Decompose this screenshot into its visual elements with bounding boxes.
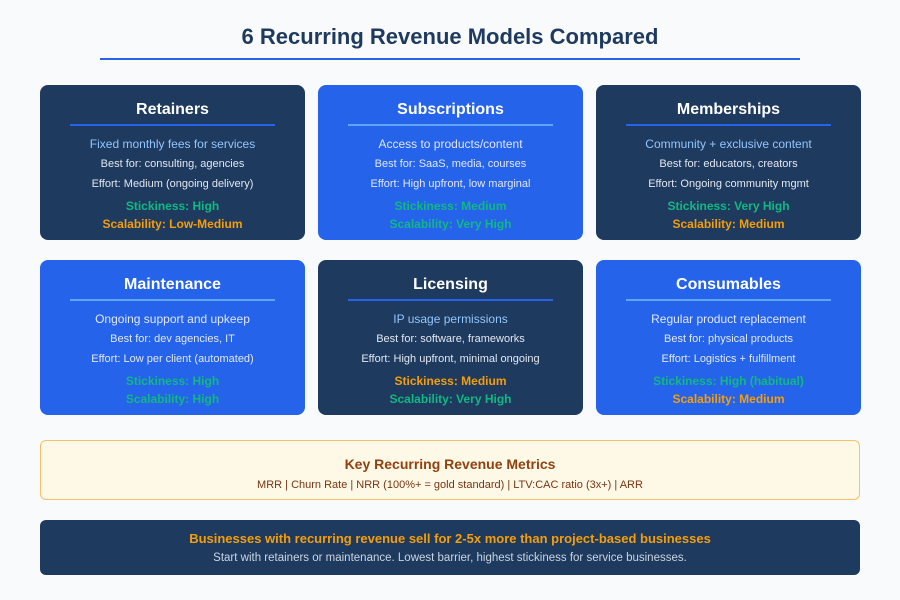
panel: memberships: Community + exclusive content: [645, 137, 812, 151]
panel: maintenance: Stickiness: High: [126, 374, 219, 388]
panel: metrics: MRR | Churn Rate | NRR (100%+ = gold standard) | LTV:CAC ratio (3x+) | ARR: [257, 479, 643, 491]
panel: retainers: Fixed monthly fees for services: [90, 137, 255, 151]
panel: takeaway: Start with retainers or maintenance. Lowest barrier, highest stickiness for service businesses.: [213, 552, 687, 564]
panel: subscriptions: Stickiness: Medium: [394, 199, 507, 213]
panel: takeaway: Businesses with recurring revenue sell for 2-5x more than project-based businesses: [189, 531, 711, 546]
panel: consumables: Stickiness: High (habitual): [653, 374, 804, 388]
panel: licensing: Scalability: Very High: [389, 392, 512, 406]
panel: subscriptions: [318, 85, 583, 240]
panel: licensing: Stickiness: Medium: [394, 374, 507, 388]
panel: retainers: Best for: consulting, agencies: [101, 158, 244, 170]
panel: takeaway: [40, 520, 860, 575]
panel: consumables: Best for: physical products: [664, 333, 793, 345]
panel: licensing: IP usage permissions: [393, 312, 508, 326]
panel: consumables: Scalability: Medium: [672, 392, 785, 406]
title: 6 Recurring Revenue Models Compared: [242, 24, 658, 49]
panel: maintenance: Maintenance: [124, 276, 221, 293]
panel: memberships: Memberships: [677, 101, 780, 118]
panel: retainers: Stickiness: High: [126, 199, 219, 213]
panel: subscriptions: Access to products/content: [378, 137, 523, 151]
panel: retainers: Scalability: Low-Medium: [102, 217, 242, 231]
panel: maintenance: Ongoing support and upkeep: [95, 312, 250, 326]
panel: licensing: Effort: High upfront, minimal ongoing: [361, 353, 540, 365]
panel: metrics: [40, 440, 860, 500]
panel: maintenance: Scalability: High: [126, 392, 219, 406]
panel: consumables: [596, 260, 861, 415]
panel: subscriptions: Subscriptions: [397, 101, 504, 118]
panel: maintenance: Effort: Low per client (automated): [91, 353, 254, 365]
panel: licensing: [318, 260, 583, 415]
panel: maintenance: [40, 260, 305, 415]
panel: metrics: Key Recurring Revenue Metrics: [345, 456, 555, 472]
panel: retainers: Retainers: [136, 101, 209, 118]
panel: retainers: [40, 85, 305, 240]
panel: consumables: Regular product replacement: [651, 312, 806, 326]
panel: memberships: Scalability: Medium: [672, 217, 785, 231]
panel: memberships: [596, 85, 861, 240]
panel: subscriptions: Best for: SaaS, media, courses: [375, 158, 526, 170]
panel: consumables: Effort: Logistics + fulfillment: [662, 353, 796, 365]
panel: licensing: Licensing: [413, 276, 488, 293]
panel: licensing: Best for: software, frameworks: [376, 333, 525, 345]
panel: retainers: Effort: Medium (ongoing delivery): [92, 178, 253, 190]
panel: consumables: Consumables: [676, 276, 781, 293]
panel: subscriptions: Effort: High upfront, low marginal: [370, 178, 530, 190]
panel: memberships: Best for: educators, creators: [659, 158, 798, 170]
panel: maintenance: Best for: dev agencies, IT: [110, 333, 235, 345]
panel: subscriptions: Scalability: Very High: [389, 217, 512, 231]
panel: memberships: Stickiness: Very High: [667, 199, 790, 213]
panel: memberships: Effort: Ongoing community mgmt: [648, 178, 809, 190]
